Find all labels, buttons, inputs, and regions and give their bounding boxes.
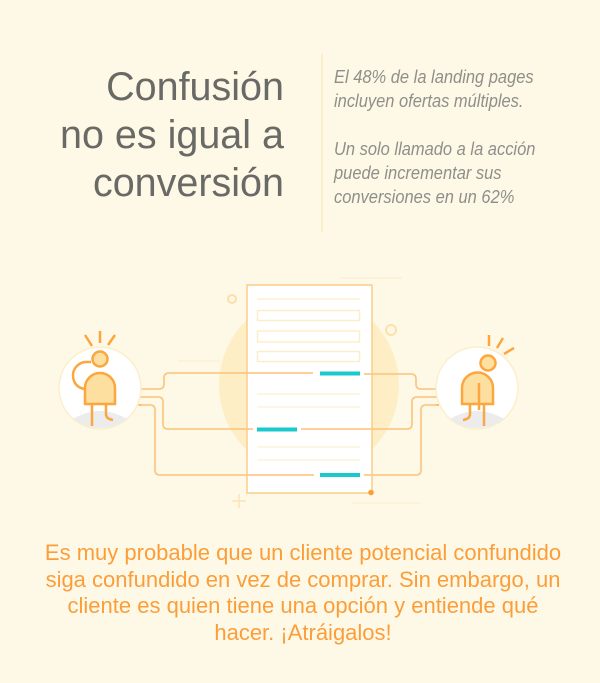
connector lines: [122, 373, 456, 475]
closing message: siga confundido en vez de comprar. Sin embargo, un: [46, 567, 560, 592]
landing page document: [247, 285, 374, 495]
call to action buttons: [257, 372, 360, 477]
left confused person: [59, 331, 141, 429]
closing message: hacer. ¡Atráigalos!: [214, 620, 392, 645]
title: conversión: [93, 161, 284, 205]
decorative elements: [178, 278, 420, 508]
closing message: [45, 540, 561, 645]
statistics text: incluyen ofertas múltiples.: [334, 91, 524, 111]
title: Confusión: [106, 65, 284, 109]
vertical divider: [321, 54, 323, 232]
closing message: cliente es quien tiene una opción y entiende qué: [68, 593, 538, 618]
closing message: Es muy probable que un cliente potencial confundido: [45, 540, 561, 565]
statistics text: puede incrementar sus: [334, 163, 502, 183]
title: [60, 65, 284, 205]
background circle: [219, 295, 399, 475]
statistics text: Un solo llamado a la acción: [334, 139, 535, 159]
right confident person: [436, 335, 518, 429]
statistics text: [334, 67, 535, 207]
title: no es igual a: [60, 113, 284, 157]
statistics text: conversiones en un 62%: [334, 187, 514, 207]
statistics text: El 48% de la landing pages: [334, 67, 534, 87]
